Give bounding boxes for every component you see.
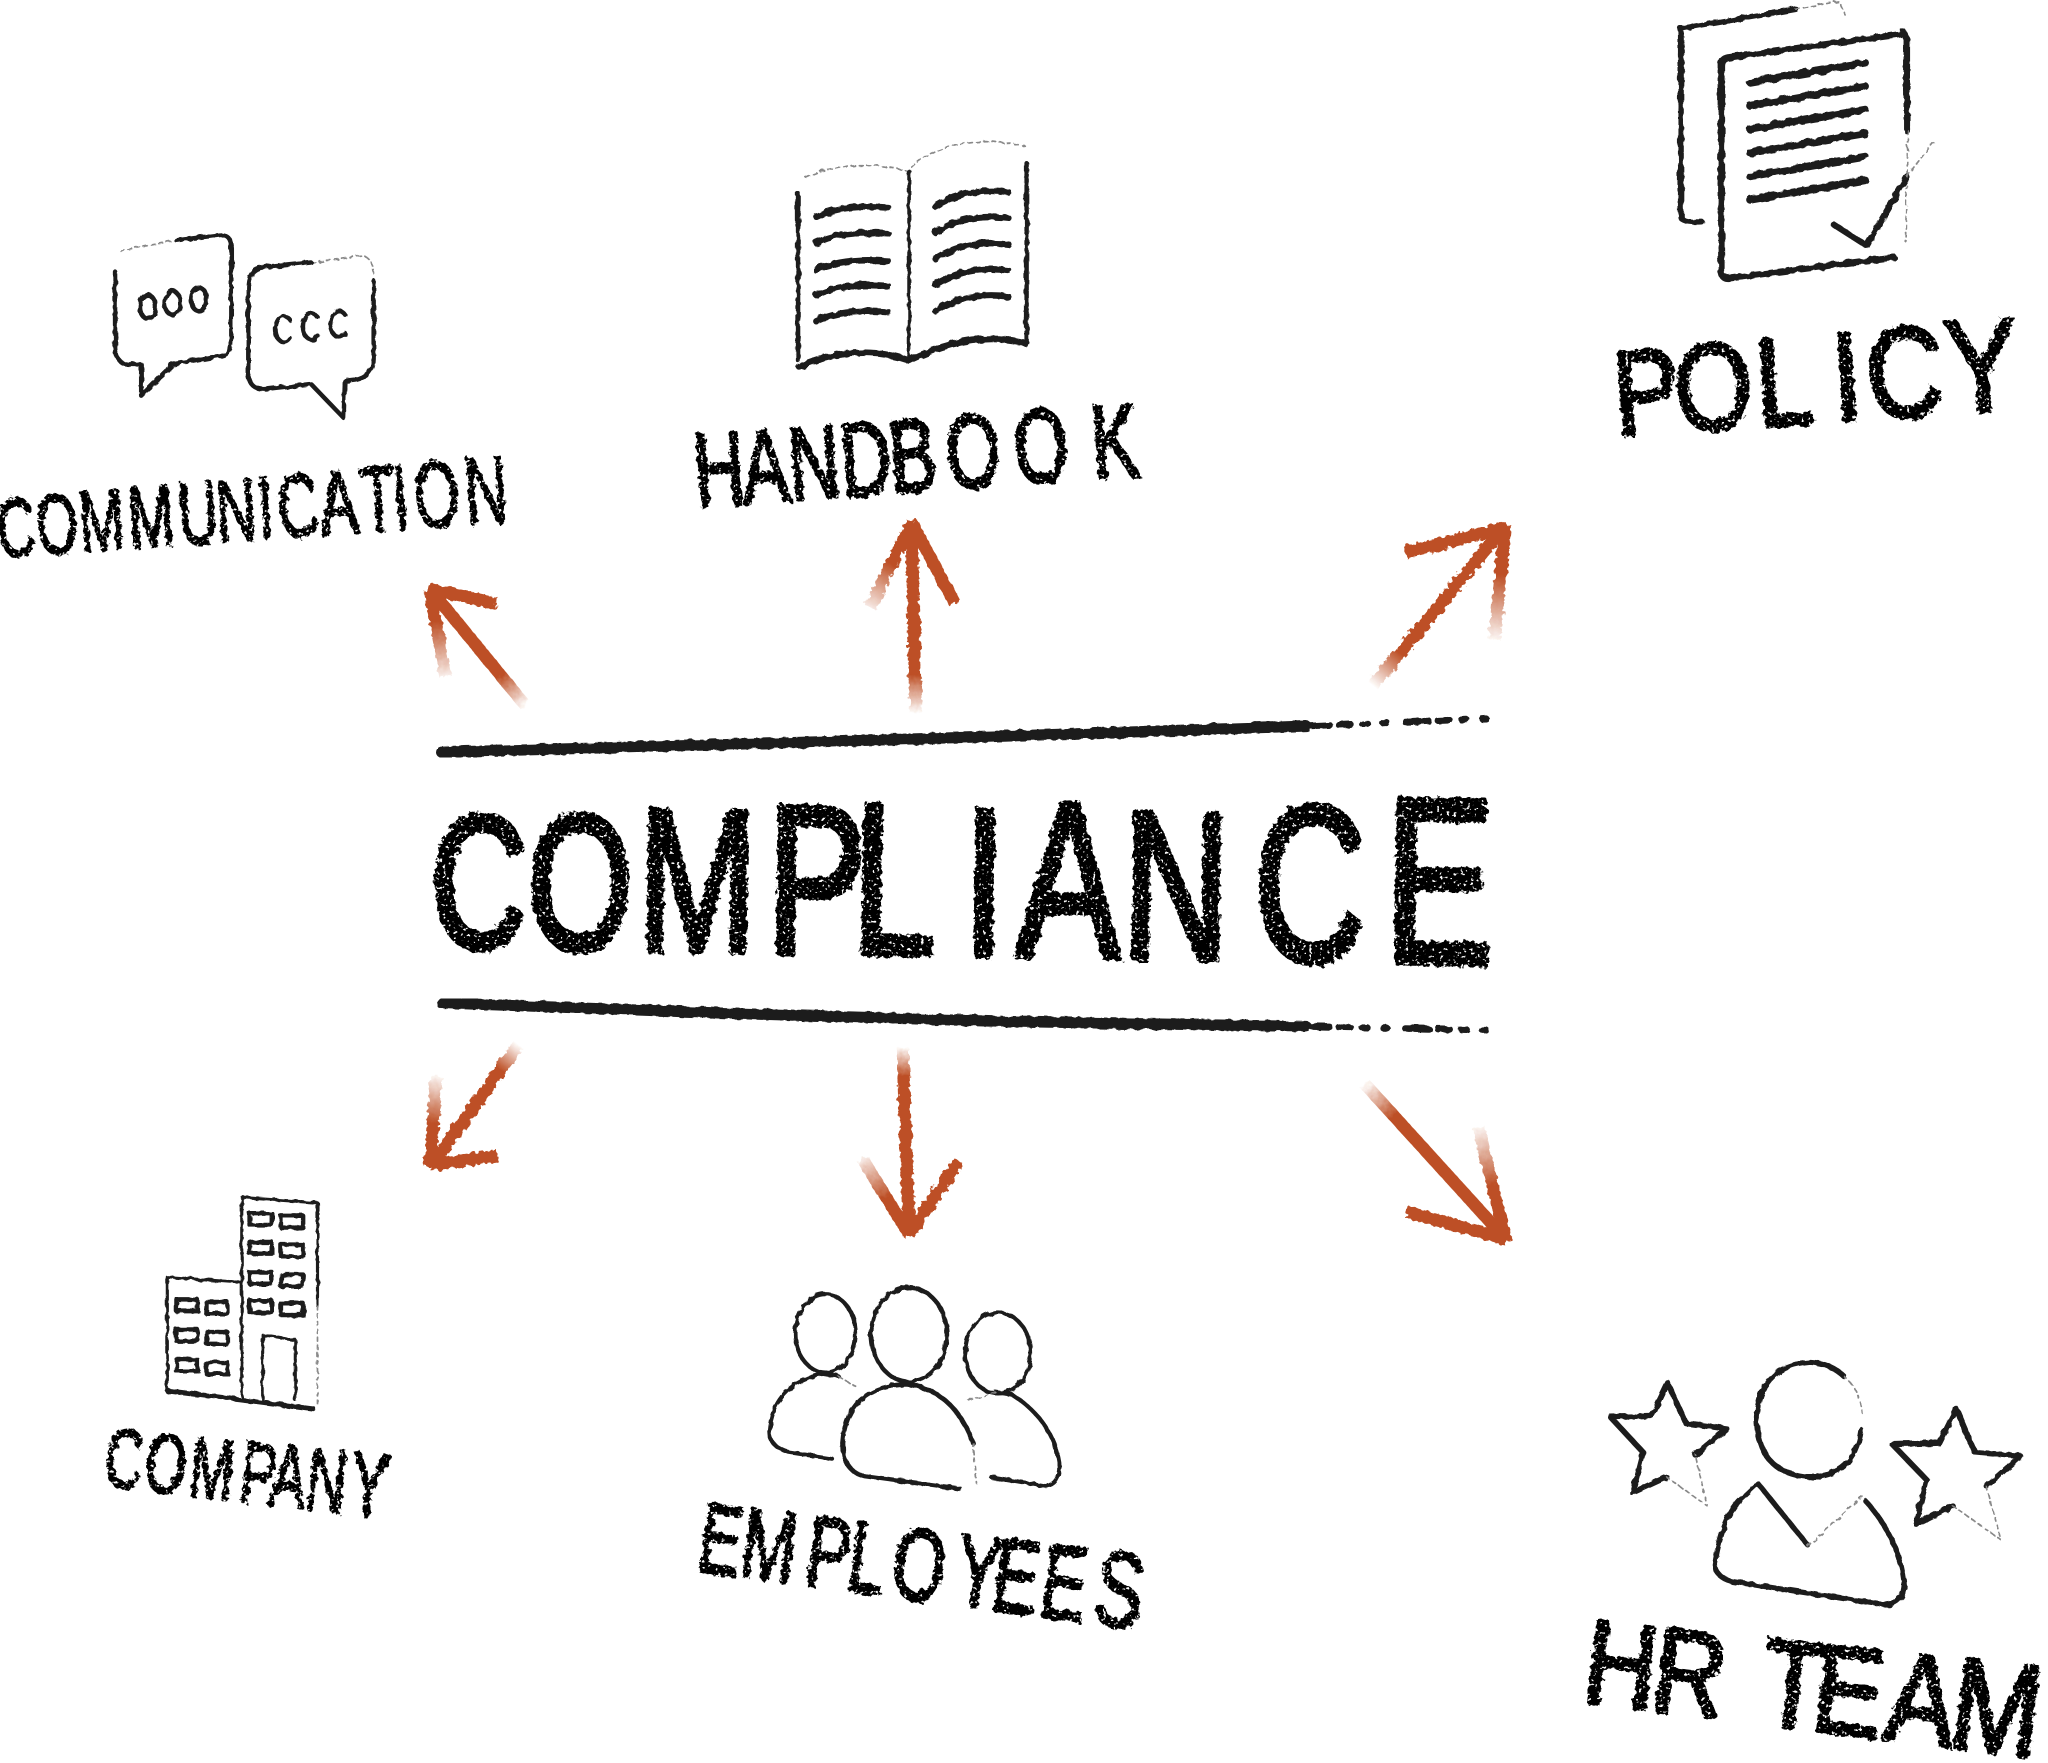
label: HR TEAM: H	[1577, 1595, 1665, 1737]
label: COMMUNICATION	[0, 436, 511, 578]
title text: O	[526, 776, 634, 992]
label: COMMUNICATION: N	[213, 460, 260, 562]
arrow: to HR team	[1365, 1084, 1507, 1241]
label: COMPANY: N	[301, 1428, 353, 1533]
label: POLICY: I	[1828, 305, 1866, 449]
label: COMMUNICATION: I	[389, 447, 412, 550]
label: POLICY: C	[1862, 299, 1947, 448]
node: employees	[692, 1288, 1151, 1653]
label: COMPANY: M	[184, 1419, 240, 1520]
node: handbook	[690, 141, 1142, 529]
label: HANDBOOK: K	[1088, 382, 1142, 501]
label: COMPANY: P	[235, 1424, 282, 1525]
bottom chalk rule	[442, 1003, 1497, 1030]
node: communication	[0, 235, 511, 578]
label: HANDBOOK: D	[836, 399, 895, 519]
label: HANDBOOK	[690, 382, 1142, 529]
label: EMPLOYEES: E	[986, 1516, 1047, 1638]
title text: C	[429, 775, 528, 989]
label: COMPANY: Y	[344, 1433, 394, 1539]
label: EMPLOYEES: E	[1034, 1521, 1096, 1644]
label: HR TEAM: T	[1754, 1613, 1832, 1758]
label: COMMUNICATION: O	[410, 441, 463, 549]
label: HANDBOOK: N	[785, 403, 843, 523]
label: COMPANY: C	[100, 1409, 149, 1508]
icon: office buildings	[167, 1198, 317, 1409]
label: EMPLOYEES: L	[842, 1500, 894, 1617]
central title: COMPLIANCE with rules	[429, 718, 1497, 1030]
arrow: to policy	[1373, 525, 1507, 686]
icon: person with two stars	[1610, 1362, 2020, 1605]
title text: P	[766, 763, 867, 999]
label: COMMUNICATION: M	[76, 473, 128, 571]
node: policy	[1608, 1, 2023, 464]
label: EMPLOYEES	[692, 1476, 1151, 1653]
icon: three people	[769, 1288, 1059, 1489]
label: POLICY: P	[1609, 324, 1683, 462]
label: HANDBOOK: B	[885, 396, 940, 515]
title text: C	[1252, 759, 1368, 1009]
arrow: to company	[430, 1045, 519, 1166]
label: HANDBOOK: O	[1010, 387, 1072, 507]
label: COMMUNICATION: U	[175, 465, 221, 564]
label: EMPLOYEES: M	[735, 1487, 804, 1604]
title text: L	[851, 760, 938, 1001]
label: POLICY: L	[1751, 310, 1817, 454]
label: COMMUNICATION: M	[125, 468, 177, 568]
arrow: to handbook	[870, 522, 955, 713]
label: EMPLOYEES: E	[692, 1483, 749, 1597]
icon: speech bubbles	[115, 235, 374, 418]
label: COMMUNICATION: T	[357, 448, 400, 553]
arrow: to employees	[862, 1047, 959, 1235]
title text: A	[1015, 755, 1123, 1005]
arrow: to communication	[428, 589, 525, 705]
label: POLICY	[1608, 290, 2023, 464]
title text	[429, 734, 1496, 1013]
label: COMMUNICATION: C	[274, 454, 322, 557]
label: COMPANY: A	[265, 1425, 313, 1528]
label: EMPLOYEES: Y	[948, 1512, 1009, 1633]
node: company	[100, 1198, 394, 1539]
label: HANDBOOK: H	[690, 410, 748, 529]
top chalk rule	[442, 718, 1497, 752]
label: HR TEAM	[1577, 1586, 2048, 1763]
label: EMPLOYEES: S	[1088, 1528, 1151, 1653]
label: COMPANY	[100, 1405, 394, 1539]
label: POLICY: Y	[1941, 290, 2023, 443]
label: HR TEAM: E	[1806, 1618, 1891, 1763]
label: COMMUNICATION: N	[461, 436, 511, 545]
label: COMMUNICATION: I	[254, 457, 277, 559]
label: HANDBOOK: A	[738, 407, 793, 526]
label: COMMUNICATION: A	[316, 451, 361, 556]
node: HR team	[1577, 1362, 2048, 1763]
label: HR TEAM: R	[1646, 1601, 1762, 1749]
title text: N	[1121, 769, 1231, 1004]
label: EMPLOYEES: P	[800, 1496, 858, 1613]
label: COMMUNICATION: O	[33, 477, 81, 574]
icon: open book	[798, 141, 1027, 367]
label: EMPLOYEES: O	[886, 1506, 953, 1625]
icon: documents with check mark	[1681, 1, 1934, 278]
title text: E	[1382, 749, 1496, 1013]
title text: I	[962, 766, 1007, 1001]
title text: M	[637, 768, 758, 996]
label: COMPANY: O	[140, 1414, 192, 1513]
label: POLICY: O	[1670, 315, 1757, 458]
label: HANDBOOK: O	[942, 392, 1004, 511]
